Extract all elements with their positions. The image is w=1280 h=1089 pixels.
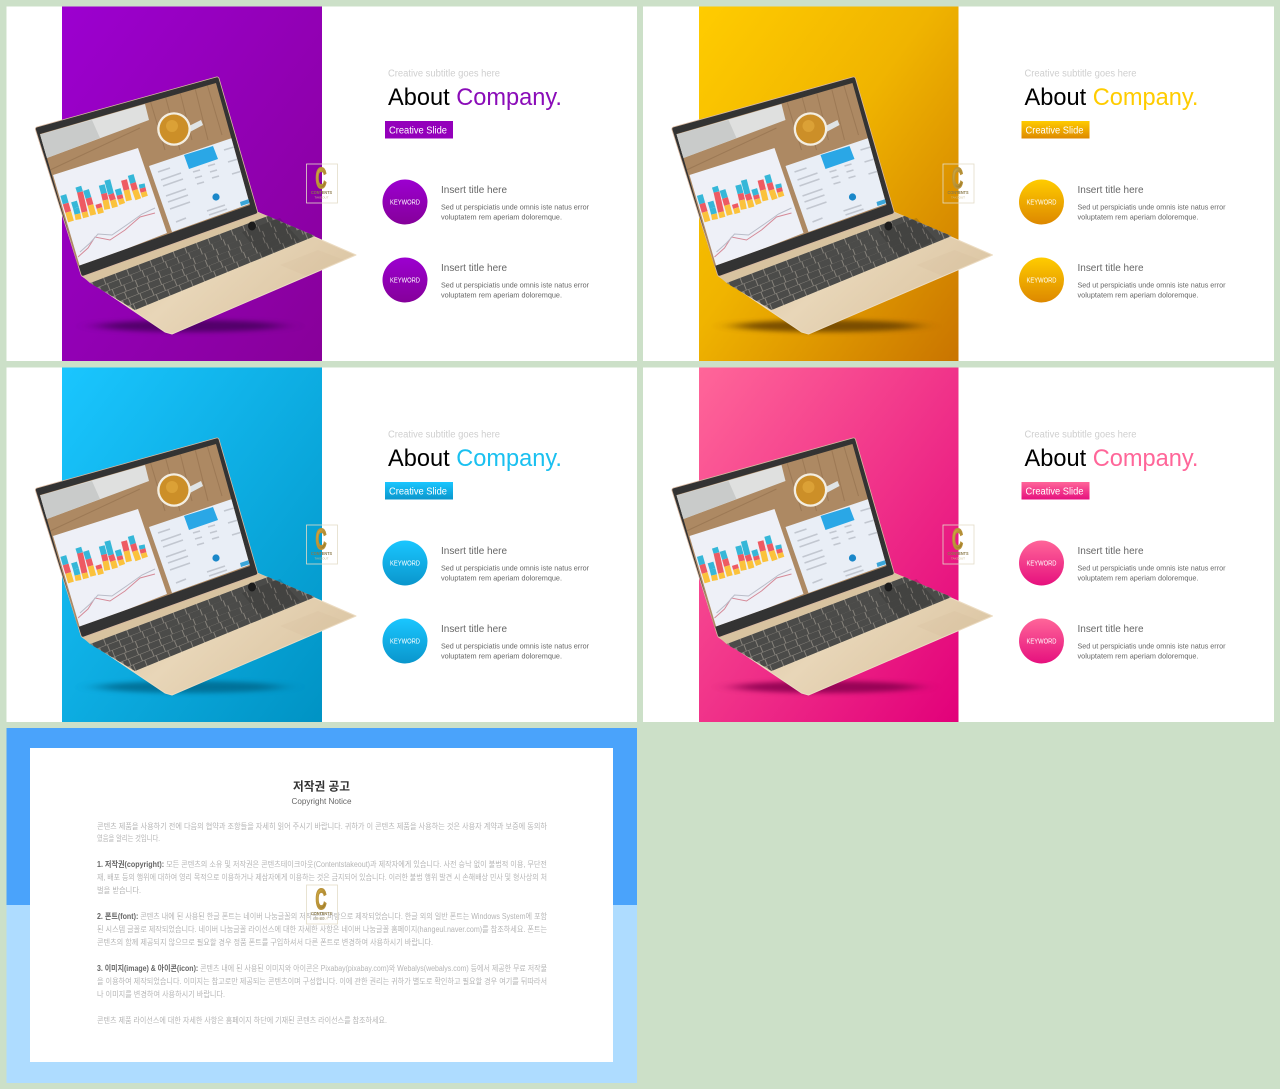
laptop shadow [734, 320, 918, 332]
tag [1022, 121, 1090, 138]
item text 2: Sed ut perspiciatis unde omnis iste natus error [1078, 642, 1226, 651]
tag: Creative Slide [389, 486, 447, 497]
watermark logo [943, 524, 974, 564]
subtitle: Creative subtitle goes here [1024, 430, 1137, 440]
heading: About Company. [388, 445, 562, 472]
item text 2 [441, 624, 589, 661]
item text 1: Insert title here [441, 185, 507, 196]
intro paragraph: 콘텐츠 제품을 사용하기 전에 다음의 협약과 조항들을 자세히 읽어 주시기 바랍니다. 귀하가 이 콘텐츠 제품을 사용하는 것은 사용자 계약과 보증에 동의하 [97, 821, 548, 831]
heading: About Company. [1024, 445, 1198, 472]
keyword circle 1: KEYWORD [1026, 560, 1056, 568]
section 2: fonts: 콘텐츠의 함께 제공되지 않으므로 필요할 경우 정품 폰트를 구입하셔서 다른 폰트로 변경하여 사용하시기 바랍니다. [97, 937, 433, 947]
subtitle: Creative subtitle goes here [1024, 68, 1137, 80]
slide 2: yellow [643, 6, 1274, 361]
section 2: fonts: 2. 폰트(font): 콘텐츠 내에 된 사용된 한글 폰트는 네이버 나눔글꼴의 저작물을 바탕으로 제작되었습니다. 한글 외의 일반 폰트는 Windows System에 포함 [97, 911, 548, 921]
keyword circle 1: KEYWORD [390, 200, 420, 206]
subtitle: Creative subtitle goes here [388, 68, 500, 80]
heading: About Company. [388, 84, 562, 111]
laptop shadow [734, 681, 918, 693]
item text 1: Sed ut perspiciatis unde omnis iste natus error [1078, 203, 1226, 212]
item text 1: voluptatem rem aperiam doloremque. [441, 213, 562, 222]
keyword circle 2 [382, 258, 428, 302]
item text 1: Insert title here [1078, 546, 1144, 557]
item text 1 [441, 185, 589, 222]
tag [1022, 482, 1090, 500]
slide 4: pink [643, 368, 1274, 722]
item text 2: Insert title here [441, 624, 507, 635]
item text 1: voluptatem rem aperiam doloremque. [1078, 213, 1198, 222]
lower light blue background [6, 905, 637, 1083]
item text 2: voluptatem rem aperiam doloremque. [441, 291, 562, 300]
watermark logo [306, 524, 338, 564]
item text 2: Insert title here [1078, 263, 1144, 274]
item text 2 [441, 263, 589, 300]
tag: Creative Slide [389, 125, 447, 136]
item text 1: Insert title here [441, 546, 507, 557]
item text 1 [441, 546, 589, 583]
watermark logo [943, 163, 974, 203]
section 1: copyright: 벌을 받습니다. [97, 885, 141, 895]
section 1: copyright: 1. 저작권(copyright): 모든 콘텐츠의 소유 및 저작권은 콘텐츠테이크아웃(Contentstakeout)과 제작자에게 있습니다. 사전 승낙 없이 불법적 이용, 무단전 [97, 859, 547, 869]
keyword circle 2 [1019, 258, 1064, 302]
item text 2: Sed ut perspiciatis unde omnis iste natus error [441, 281, 589, 290]
item text 2: voluptatem rem aperiam doloremque. [1078, 652, 1198, 661]
laptop mockup [38, 79, 356, 334]
item text 2: voluptatem rem aperiam doloremque. [1078, 291, 1198, 300]
section 3: images and icons: 3. 이미지(image) & 아이콘(icon): 콘텐츠 내에 된 사용된 이미지와 아이콘은 Pixabay(pixabay.com)와 Webalys(webalys.com) 등에서 제공한 무료 저작물 [97, 963, 547, 973]
item text 1: voluptatem rem aperiam doloremque. [441, 574, 562, 583]
white notice card [30, 748, 613, 1062]
section 1: copyright: 재, 배포 등의 행위에 대하여 영리 목적으로 이용하거나 제삼자에게 이용하는 것은 금지되어 있습니다. 이러한 불법 행위 발견 시 손해배상 민사 및 형사상의 처 [97, 872, 547, 882]
notice subtitle: Copyright Notice [292, 796, 352, 806]
item text 2: Sed ut perspiciatis unde omnis iste natus error [441, 642, 589, 651]
item text 2: voluptatem rem aperiam doloremque. [441, 652, 562, 661]
slide 5: copyright notice [6, 728, 637, 1083]
section 2: fonts [97, 911, 548, 947]
item text 1: Insert title here [1078, 185, 1144, 196]
purple side panel [62, 6, 322, 361]
tag [385, 121, 453, 138]
keyword circle 2 [382, 618, 428, 664]
item text 1: Sed ut perspiciatis unde omnis iste natus error [441, 203, 589, 212]
tag [385, 482, 453, 500]
item text 2 [1078, 263, 1226, 300]
subtitle: Creative subtitle goes here [388, 430, 500, 440]
item text 1 [1078, 546, 1226, 583]
laptop shadow [98, 681, 282, 693]
keyword circle 2: KEYWORD [1026, 278, 1056, 284]
intro paragraph: 였음을 알리는 것입니다. [97, 833, 160, 843]
closing line: 콘텐츠 제품 라이선스에 대한 자세한 사항은 홈페이지 하단에 기재된 콘텐츠 라이선스를 참조하세요. [97, 1015, 387, 1025]
laptop mockup [674, 79, 992, 334]
keyword circle 1 [1019, 540, 1064, 586]
keyword circle 1 [1019, 180, 1064, 224]
notice title: 저작권 공고 [293, 778, 350, 794]
watermark logo [306, 163, 338, 203]
section 3: images and icons: 나 이미지를 변경하여 사용하시기 바랍니다. [97, 989, 225, 999]
intro paragraph [97, 821, 548, 843]
section 1: copyright [97, 859, 547, 895]
tag: Creative Slide [1026, 486, 1084, 497]
watermark logo [306, 884, 338, 924]
blue side panel [62, 368, 322, 722]
keyword circle 2: KEYWORD [390, 278, 420, 284]
item text 1: Sed ut perspiciatis unde omnis iste natus error [1078, 564, 1226, 573]
keyword circle 1: KEYWORD [1026, 200, 1056, 206]
item text 1: voluptatem rem aperiam doloremque. [1078, 574, 1198, 583]
keyword circle 2: KEYWORD [1026, 638, 1056, 646]
keyword circle 2: KEYWORD [390, 638, 420, 646]
keyword circle 1 [382, 540, 428, 586]
laptop mockup [38, 440, 356, 695]
yellow side panel [699, 6, 958, 361]
laptop shadow [98, 320, 282, 332]
keyword circle 1 [382, 180, 428, 224]
item text 2: Insert title here [441, 263, 507, 274]
item text 2: Insert title here [1078, 624, 1144, 635]
section 2: fonts: 된 시스템 글꼴로 제작되었습니다. 네이버 나눔글꼴 라이선스에 대한 자세한 사항은 네이버 나눔글꼴 홈페이지(hangeul.naver.com)를 참조하세요. 폰트는 [97, 924, 547, 934]
slide 1: purple [6, 6, 637, 361]
laptop mockup [674, 440, 992, 695]
pink side panel [699, 368, 958, 722]
item text 2 [1078, 624, 1226, 661]
item text 1: Sed ut perspiciatis unde omnis iste natus error [441, 564, 589, 573]
heading: About Company. [1024, 84, 1198, 111]
tag: Creative Slide [1026, 125, 1084, 136]
slide 3: blue [6, 368, 637, 722]
keyword circle 1: KEYWORD [390, 560, 420, 568]
keyword circle 2 [1019, 618, 1064, 664]
section 3: images and icons [97, 963, 547, 999]
item text 2: Sed ut perspiciatis unde omnis iste natus error [1078, 281, 1226, 290]
section 3: images and icons: 을 이용하여 제작되었습니다. 이미지는 참고로만 제공되는 콘텐츠이며 구성합니다. 이에 관한 권리는 귀하가 별도로 확인하고 필요할 경우 여기를 뒤따라서 [97, 976, 547, 986]
upper blue background [6, 728, 637, 905]
item text 1 [1078, 185, 1226, 222]
